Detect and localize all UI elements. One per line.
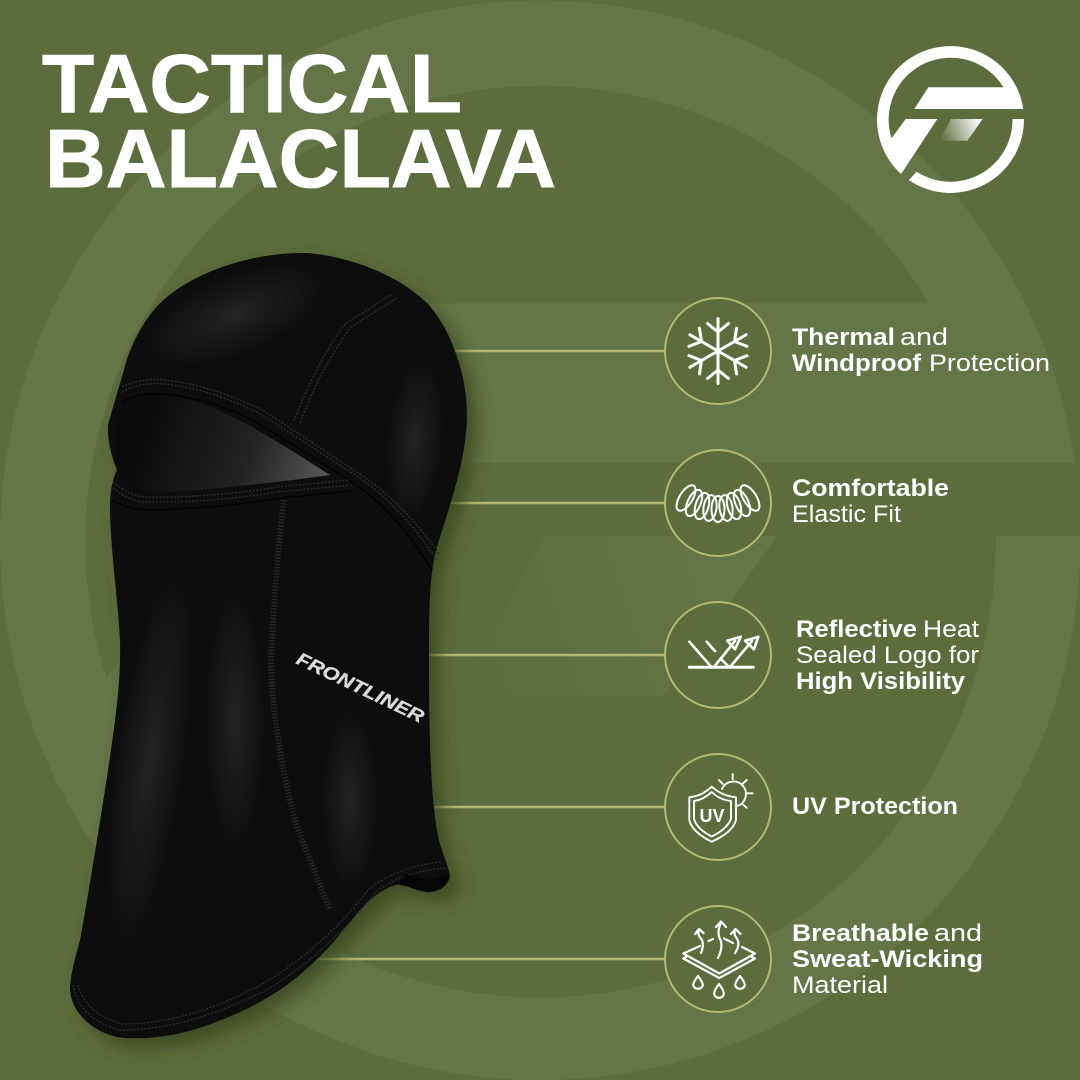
feature: breathable and sweat-wicking — [665, 906, 983, 1012]
label: High Visibility — [796, 668, 966, 695]
product: black balaclava — [70, 242, 467, 1038]
label: and — [900, 324, 948, 351]
label: Protection — [929, 350, 1050, 377]
reflective brand print: FRONTLINER — [293, 649, 427, 727]
label: UV Protection — [792, 793, 958, 820]
label: Breathable — [792, 920, 929, 947]
eye opening — [115, 395, 330, 492]
balaclava silhouette — [70, 253, 467, 1038]
icon badge: fabric layers with vapour and drops — [665, 906, 771, 1012]
label — [796, 616, 979, 695]
label: Comfortable — [792, 475, 949, 502]
title — [42, 37, 556, 205]
label — [792, 920, 983, 999]
label — [792, 324, 1050, 377]
label: Heat — [923, 616, 979, 643]
feature: UV protection — [665, 754, 958, 860]
brand logo — [877, 46, 1024, 193]
label: Sweat-Wicking — [792, 946, 983, 973]
label: Material — [792, 972, 888, 999]
feature: thermal and windproof — [665, 298, 1050, 404]
label: Windproof — [792, 350, 922, 377]
label: Sealed Logo for — [796, 642, 979, 669]
icon badge: UV shield and sun — [665, 754, 771, 860]
title: BALACLAVA — [45, 112, 556, 205]
label: Reflective — [796, 616, 917, 643]
icon badge: coil spring — [665, 450, 771, 556]
title: TACTICAL — [42, 37, 462, 130]
icon badge: UV shield and sun: UV — [700, 806, 724, 826]
feature: comfortable elastic fit — [665, 450, 949, 556]
connector lines — [300, 351, 664, 959]
icon badge: snowflake — [665, 298, 771, 404]
label — [792, 475, 949, 528]
label: and — [934, 920, 982, 947]
label: Thermal — [792, 324, 895, 351]
label: Elastic Fit — [792, 501, 901, 528]
feature: reflective logo — [665, 602, 979, 708]
icon badge: reflection arrows — [665, 602, 771, 708]
seams and hems — [73, 294, 449, 1030]
fabric folds — [122, 283, 433, 878]
